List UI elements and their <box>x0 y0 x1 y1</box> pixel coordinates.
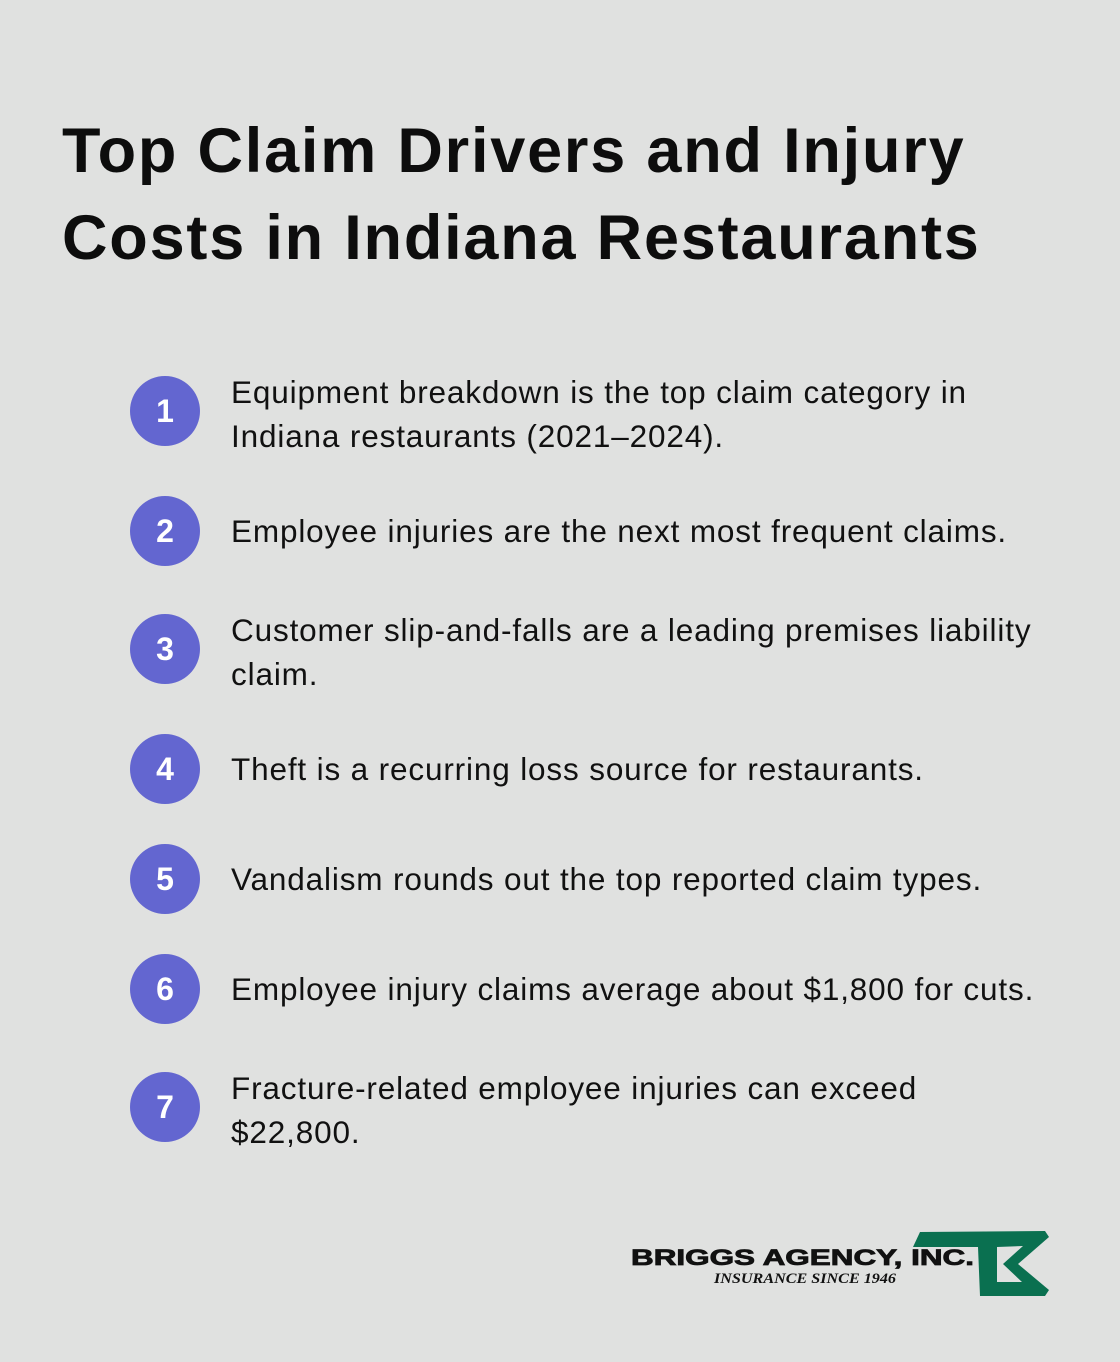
item 7 <box>130 1070 917 1150</box>
badge 2: 2 <box>156 513 174 549</box>
badge 3: 3 <box>156 631 174 667</box>
badge 6: 6 <box>156 971 174 1007</box>
item 1 <box>130 374 967 454</box>
text 3: claim. <box>231 656 318 692</box>
logo: BRIGGS AGENCY, INC. <box>631 1245 974 1270</box>
item 2 <box>130 496 1007 566</box>
badge 4 <box>130 734 200 804</box>
text 2: Employee injuries are the next most frequent claims. <box>231 513 1007 549</box>
item 6 <box>130 954 1034 1024</box>
text 1: Equipment breakdown is the top claim category in <box>231 374 967 410</box>
item 3 <box>130 612 1031 692</box>
text 7: $22,800. <box>231 1114 360 1150</box>
text 4: Theft is a recurring loss source for restaurants. <box>231 751 924 787</box>
title: Costs in Indiana Restaurants <box>62 203 981 273</box>
badge 7: 7 <box>156 1089 174 1125</box>
text 1: Indiana restaurants (2021–2024). <box>231 418 724 454</box>
badge 1: 1 <box>156 393 174 429</box>
badge 1 <box>130 376 200 446</box>
text 1 <box>231 374 967 454</box>
title: Top Claim Drivers and Injury <box>62 116 965 186</box>
logo: INSURANCE SINCE 1946 <box>713 1271 897 1287</box>
badge 3 <box>130 614 200 684</box>
badge 5: 5 <box>156 861 174 897</box>
title <box>62 116 981 273</box>
text 7 <box>231 1070 917 1150</box>
item 5 <box>130 844 982 914</box>
item 4 <box>130 734 924 804</box>
badge 2 <box>130 496 200 566</box>
text 3: Customer slip-and-falls are a leading premises liability <box>231 612 1031 648</box>
text 3 <box>231 612 1031 692</box>
badge 4: 4 <box>156 751 174 787</box>
badge 6 <box>130 954 200 1024</box>
badge 7 <box>130 1072 200 1142</box>
text 6: Employee injury claims average about $1,800 for cuts. <box>231 971 1034 1007</box>
text 5: Vandalism rounds out the top reported claim types. <box>231 861 982 897</box>
badge 5 <box>130 844 200 914</box>
text 7: Fracture-related employee injuries can exceed <box>231 1070 917 1106</box>
